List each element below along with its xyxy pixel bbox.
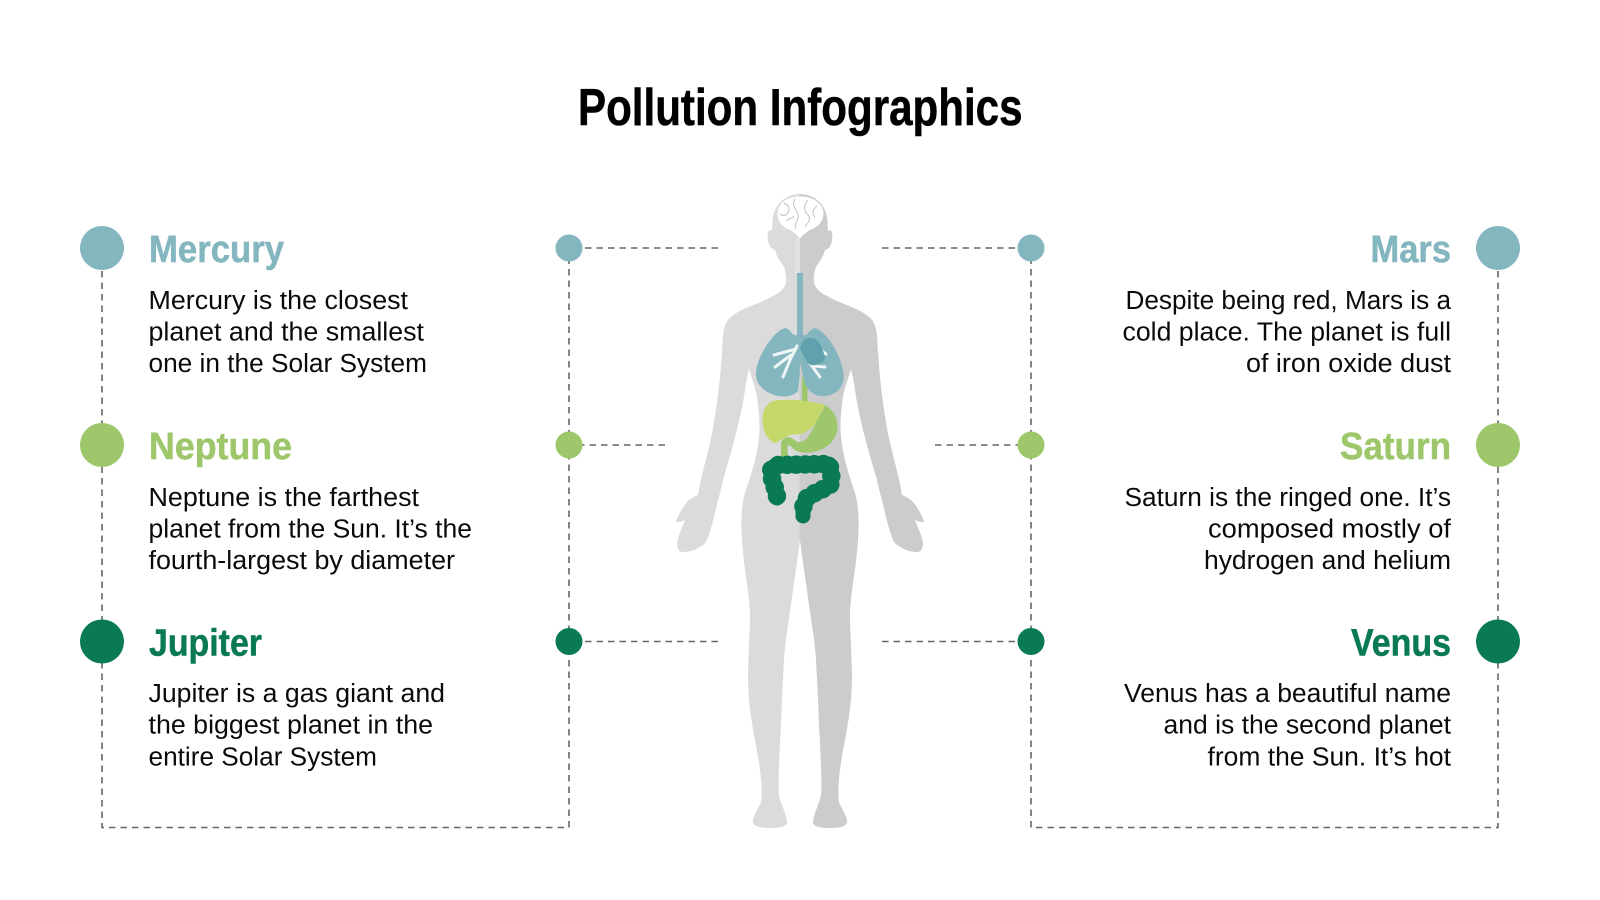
heading: Venus: Venus <box>1351 622 1451 664</box>
text: Mars description: Despite being red, Mars is a <box>1126 287 1452 315</box>
text: Mercury description: Mercury is the closest <box>148 287 408 315</box>
text: Saturn description <box>1124 484 1452 575</box>
text: Venus description: from the Sun. It’s hot <box>1208 744 1451 772</box>
icon: lungs <box>756 328 844 396</box>
right dashed bracket <box>1031 248 1498 828</box>
text: Mercury description: one in the Solar System <box>148 350 427 378</box>
neck highlight <box>795 238 800 274</box>
panel: Venus <box>1124 620 1520 772</box>
marker: bottom left connector dot <box>556 628 582 655</box>
panel: Mercury <box>80 226 427 378</box>
connector: top left <box>582 247 718 249</box>
text: Neptune description: planet from the Sun. It’s the <box>148 516 472 544</box>
text: Neptune description: fourth-largest by diameter <box>148 547 456 575</box>
icon: liver <box>763 400 825 443</box>
text: Saturn description: Saturn is the ringed one. It’s <box>1124 484 1451 512</box>
heading: Mercury: Mercury <box>149 229 284 271</box>
marker: middle left connector dot <box>556 432 582 458</box>
icon: heart <box>800 338 825 365</box>
text: Jupiter description: Jupiter is a gas giant and <box>148 680 445 708</box>
silhouette: left half <box>676 194 800 828</box>
text: Venus description: and is the second planet <box>1164 712 1451 740</box>
icon: stomach and duodenum <box>781 405 838 458</box>
text: Venus description: Venus has a beautiful name <box>1124 680 1451 708</box>
text: Neptune description: Neptune is the farthest <box>148 484 419 512</box>
connector: top right <box>882 247 1018 249</box>
text: Neptune description <box>148 484 472 575</box>
panel: Jupiter <box>80 620 445 772</box>
heading: Jupiter: Jupiter <box>149 622 262 664</box>
marker: Saturn <box>1476 423 1520 467</box>
human body figure <box>676 194 924 828</box>
text: Jupiter description <box>148 680 445 772</box>
text: Jupiter description: the biggest planet in the <box>148 712 433 740</box>
icon: trachea <box>797 273 803 335</box>
text: Mars description <box>1122 287 1452 378</box>
icon: brain <box>778 196 824 238</box>
text: Mars description: of iron oxide dust <box>1246 350 1451 378</box>
text: Saturn description: composed mostly of <box>1208 516 1452 544</box>
heading: Mars: Mars <box>1370 229 1451 271</box>
connector: bottom right <box>882 640 1018 642</box>
panel: Mars <box>1122 226 1520 378</box>
text: Venus description <box>1124 680 1451 772</box>
panel: Neptune <box>80 423 472 575</box>
heading: Neptune: Neptune <box>149 426 292 468</box>
marker: middle right connector dot <box>1018 432 1044 458</box>
text: Mercury description <box>148 287 427 378</box>
connector: middle left <box>582 444 665 446</box>
title: Pollution Infographics <box>578 79 1022 137</box>
left dashed bracket <box>102 248 569 828</box>
marker: bottom right connector dot <box>1018 628 1044 655</box>
connector: bottom left <box>582 640 718 642</box>
text: Mars description: cold place. The planet is full <box>1122 318 1451 346</box>
icon: large intestine <box>771 464 831 516</box>
marker: Mercury <box>80 226 124 270</box>
marker: Jupiter <box>80 620 124 664</box>
silhouette: right half <box>800 194 924 828</box>
marker: Venus <box>1476 620 1520 664</box>
text: Jupiter description: entire Solar System <box>148 744 377 772</box>
heading: Saturn: Saturn <box>1340 426 1451 468</box>
icon: esophagus <box>802 377 808 409</box>
marker: Mars <box>1476 226 1520 270</box>
text: Mercury description: planet and the smallest <box>148 318 424 346</box>
text: Saturn description: hydrogen and helium <box>1204 547 1451 575</box>
lung bronchi <box>774 346 826 377</box>
marker: Neptune <box>80 423 124 467</box>
marker: top right connector dot <box>1018 234 1044 262</box>
marker: top left connector dot <box>556 234 582 262</box>
connector: middle right <box>935 444 1018 446</box>
panel: Saturn <box>1124 423 1520 575</box>
